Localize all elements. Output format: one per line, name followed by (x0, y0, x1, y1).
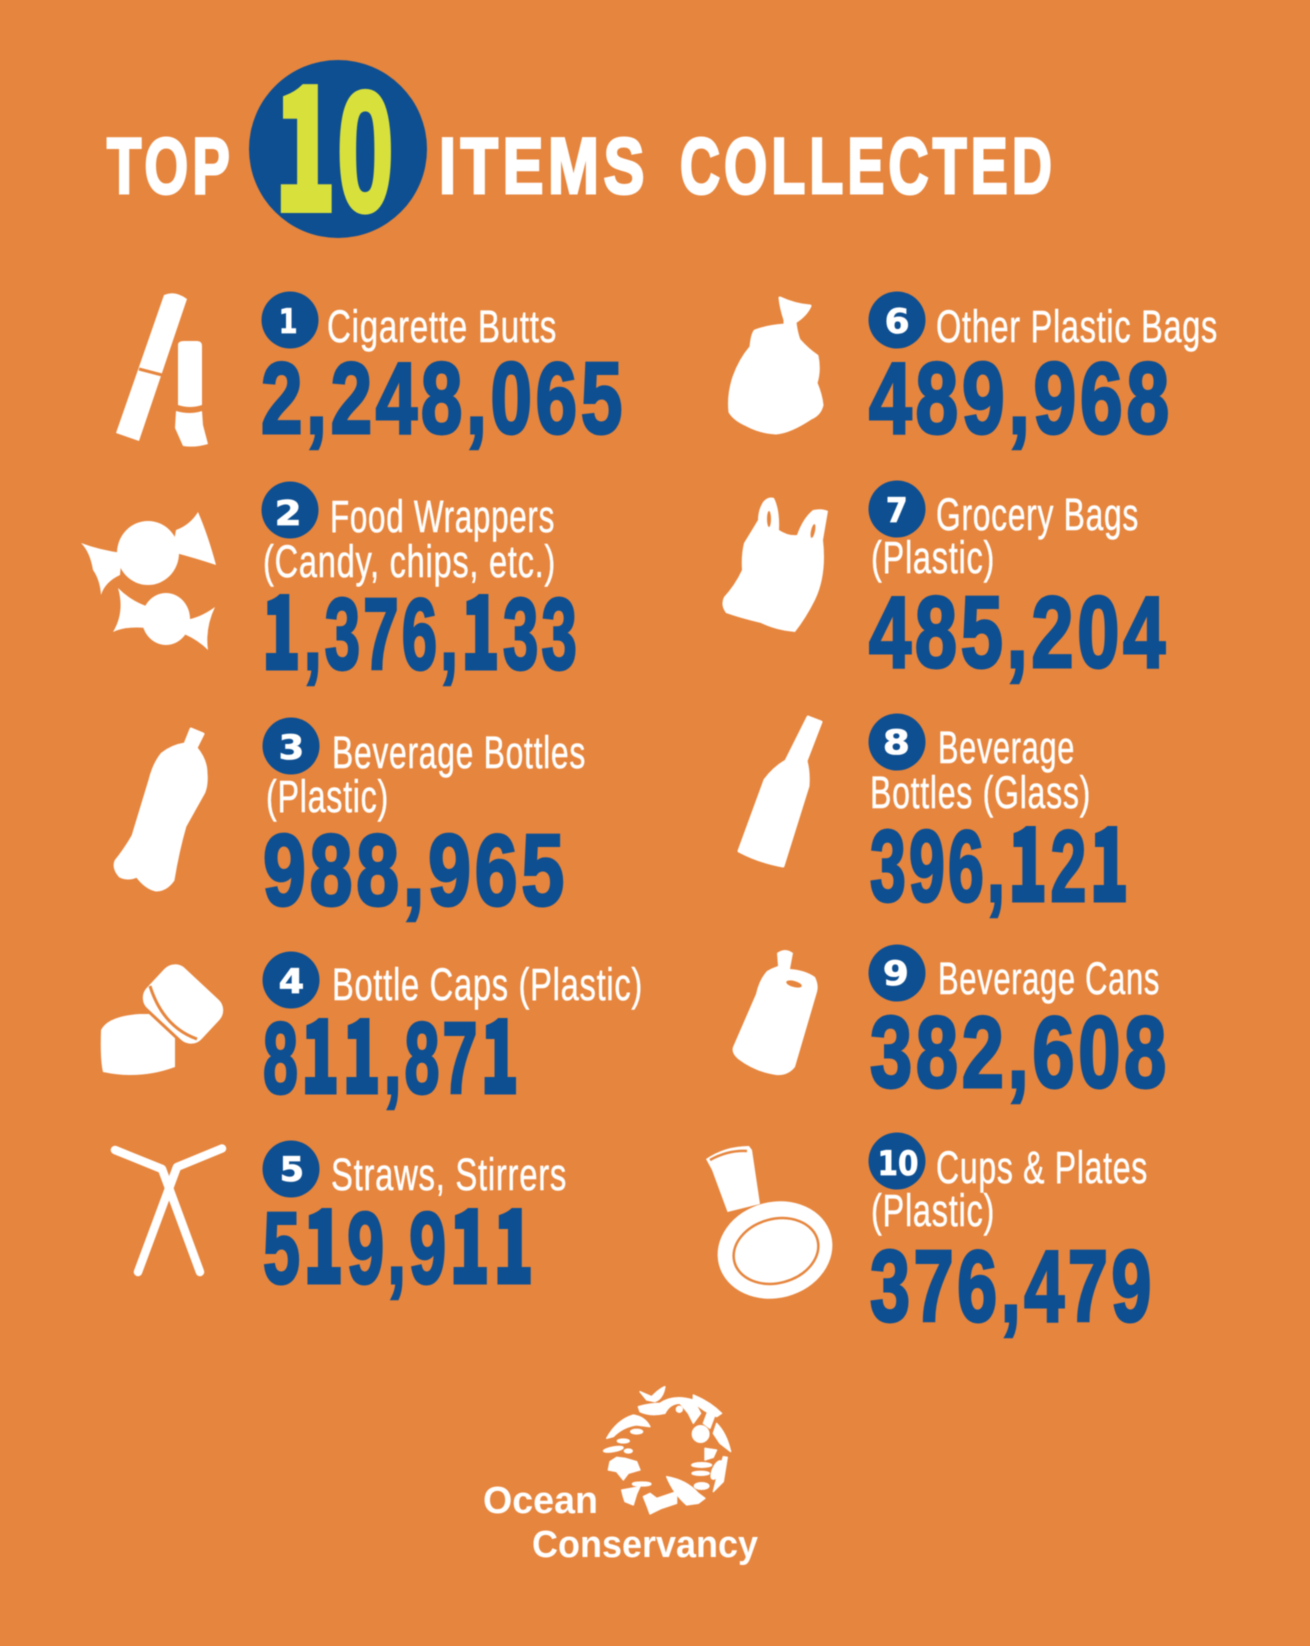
label: Food Wrappers (330, 491, 555, 542)
logo wordmark: Conservancy (532, 1524, 758, 1566)
panel: item 5 straws and stirrers (115, 1140, 567, 1313)
label: (Plastic) (871, 532, 995, 583)
icon: plastic bottle (115, 729, 206, 890)
panel: item 8 glass beverage bottles (739, 714, 1132, 931)
label: Beverage Bottles (332, 727, 586, 778)
icon: cigarette butts (116, 293, 208, 447)
count: 2,248,065 (261, 343, 626, 455)
rank badge 3: 3 (279, 728, 304, 768)
rank badge 2 (262, 482, 318, 538)
count: 376,479 (870, 1231, 1155, 1343)
icon: cup and plate (706, 1146, 843, 1311)
logo wordmark: Ocean (483, 1480, 598, 1522)
label: Bottle Caps (Plastic) (332, 959, 643, 1010)
rank badge 1: 1 (279, 302, 298, 342)
count: 519,911 (263, 1167, 537, 1313)
rank badge 1 (262, 292, 318, 348)
label: Beverage Cans (938, 953, 1160, 1004)
icon: bottle caps (101, 956, 231, 1075)
label: (Candy, chips, etc.) (263, 536, 556, 587)
title (107, 11, 1056, 261)
rank badge 5 (262, 1140, 320, 1198)
count: 1,376,133 (262, 553, 580, 699)
rank badge 7 (868, 480, 926, 538)
icon: tied bag (730, 298, 822, 433)
label: (Plastic) (266, 771, 389, 822)
panel: item 4 plastic bottle caps (101, 952, 643, 1123)
label (870, 722, 1091, 818)
rank badge 5: 5 (280, 1150, 304, 1190)
rank badge 9 (868, 944, 926, 1002)
logo: Ocean Conservancy (483, 1387, 758, 1566)
panel: item 1 cigarette butts (116, 292, 626, 455)
label (871, 489, 1139, 583)
rank badge 7: 7 (886, 491, 908, 531)
rank badge 10: 10 (878, 1144, 918, 1184)
count: 485,204 (869, 577, 1169, 689)
title: ITEMS (439, 121, 649, 210)
logo wordmark (483, 1480, 758, 1566)
panel: item 6 other plastic bags (730, 292, 1218, 455)
icon: grocery bag (722, 498, 828, 632)
label: Cigarette Butts (327, 301, 557, 352)
count: 382,608 (870, 997, 1170, 1109)
icon: beverage can (733, 950, 818, 1075)
rank badge 4 (262, 952, 320, 1008)
panel: item 3 plastic beverage bottles (115, 718, 586, 927)
count: 988,965 (263, 815, 568, 927)
panel: item 7 plastic grocery bags (722, 480, 1169, 689)
rank badge 9: 9 (883, 954, 909, 994)
label: Cups & Plates (936, 1142, 1148, 1193)
icon: ring of sea creatures (603, 1387, 731, 1514)
rank badge 2: 2 (275, 494, 302, 534)
title badge: 10: 10 (274, 11, 394, 261)
rank badge 6: 6 (885, 302, 910, 342)
label: Grocery Bags (936, 489, 1139, 540)
rank badge 10 (868, 1132, 926, 1190)
rank badge 8 (868, 714, 926, 770)
panel: item 9 beverage cans (733, 944, 1170, 1109)
label: Beverage (938, 722, 1075, 773)
label (266, 727, 586, 822)
title: TOP (107, 121, 234, 210)
label: Bottles (Glass) (870, 767, 1091, 818)
icon: crossed straws (115, 1148, 222, 1272)
rank badge 4: 4 (279, 962, 304, 1002)
count: 811,871 (263, 977, 522, 1123)
label (263, 491, 556, 587)
rank badge 6 (868, 292, 926, 348)
panel: item 2 food wrappers (81, 482, 580, 699)
rank badge 3 (262, 718, 320, 774)
label: Straws, Stirrers (331, 1149, 567, 1200)
rank badge 8: 8 (883, 723, 910, 763)
label: (Plastic) (871, 1185, 995, 1236)
count: 489,968 (869, 343, 1173, 455)
panel: item 10 plastic cups and plates (706, 1132, 1155, 1343)
icon: candy wrappers (81, 512, 216, 650)
count: 396,121 (870, 785, 1132, 931)
icon: glass bottle (739, 717, 821, 866)
title: COLLECTED (680, 121, 1056, 210)
label (871, 1142, 1148, 1236)
